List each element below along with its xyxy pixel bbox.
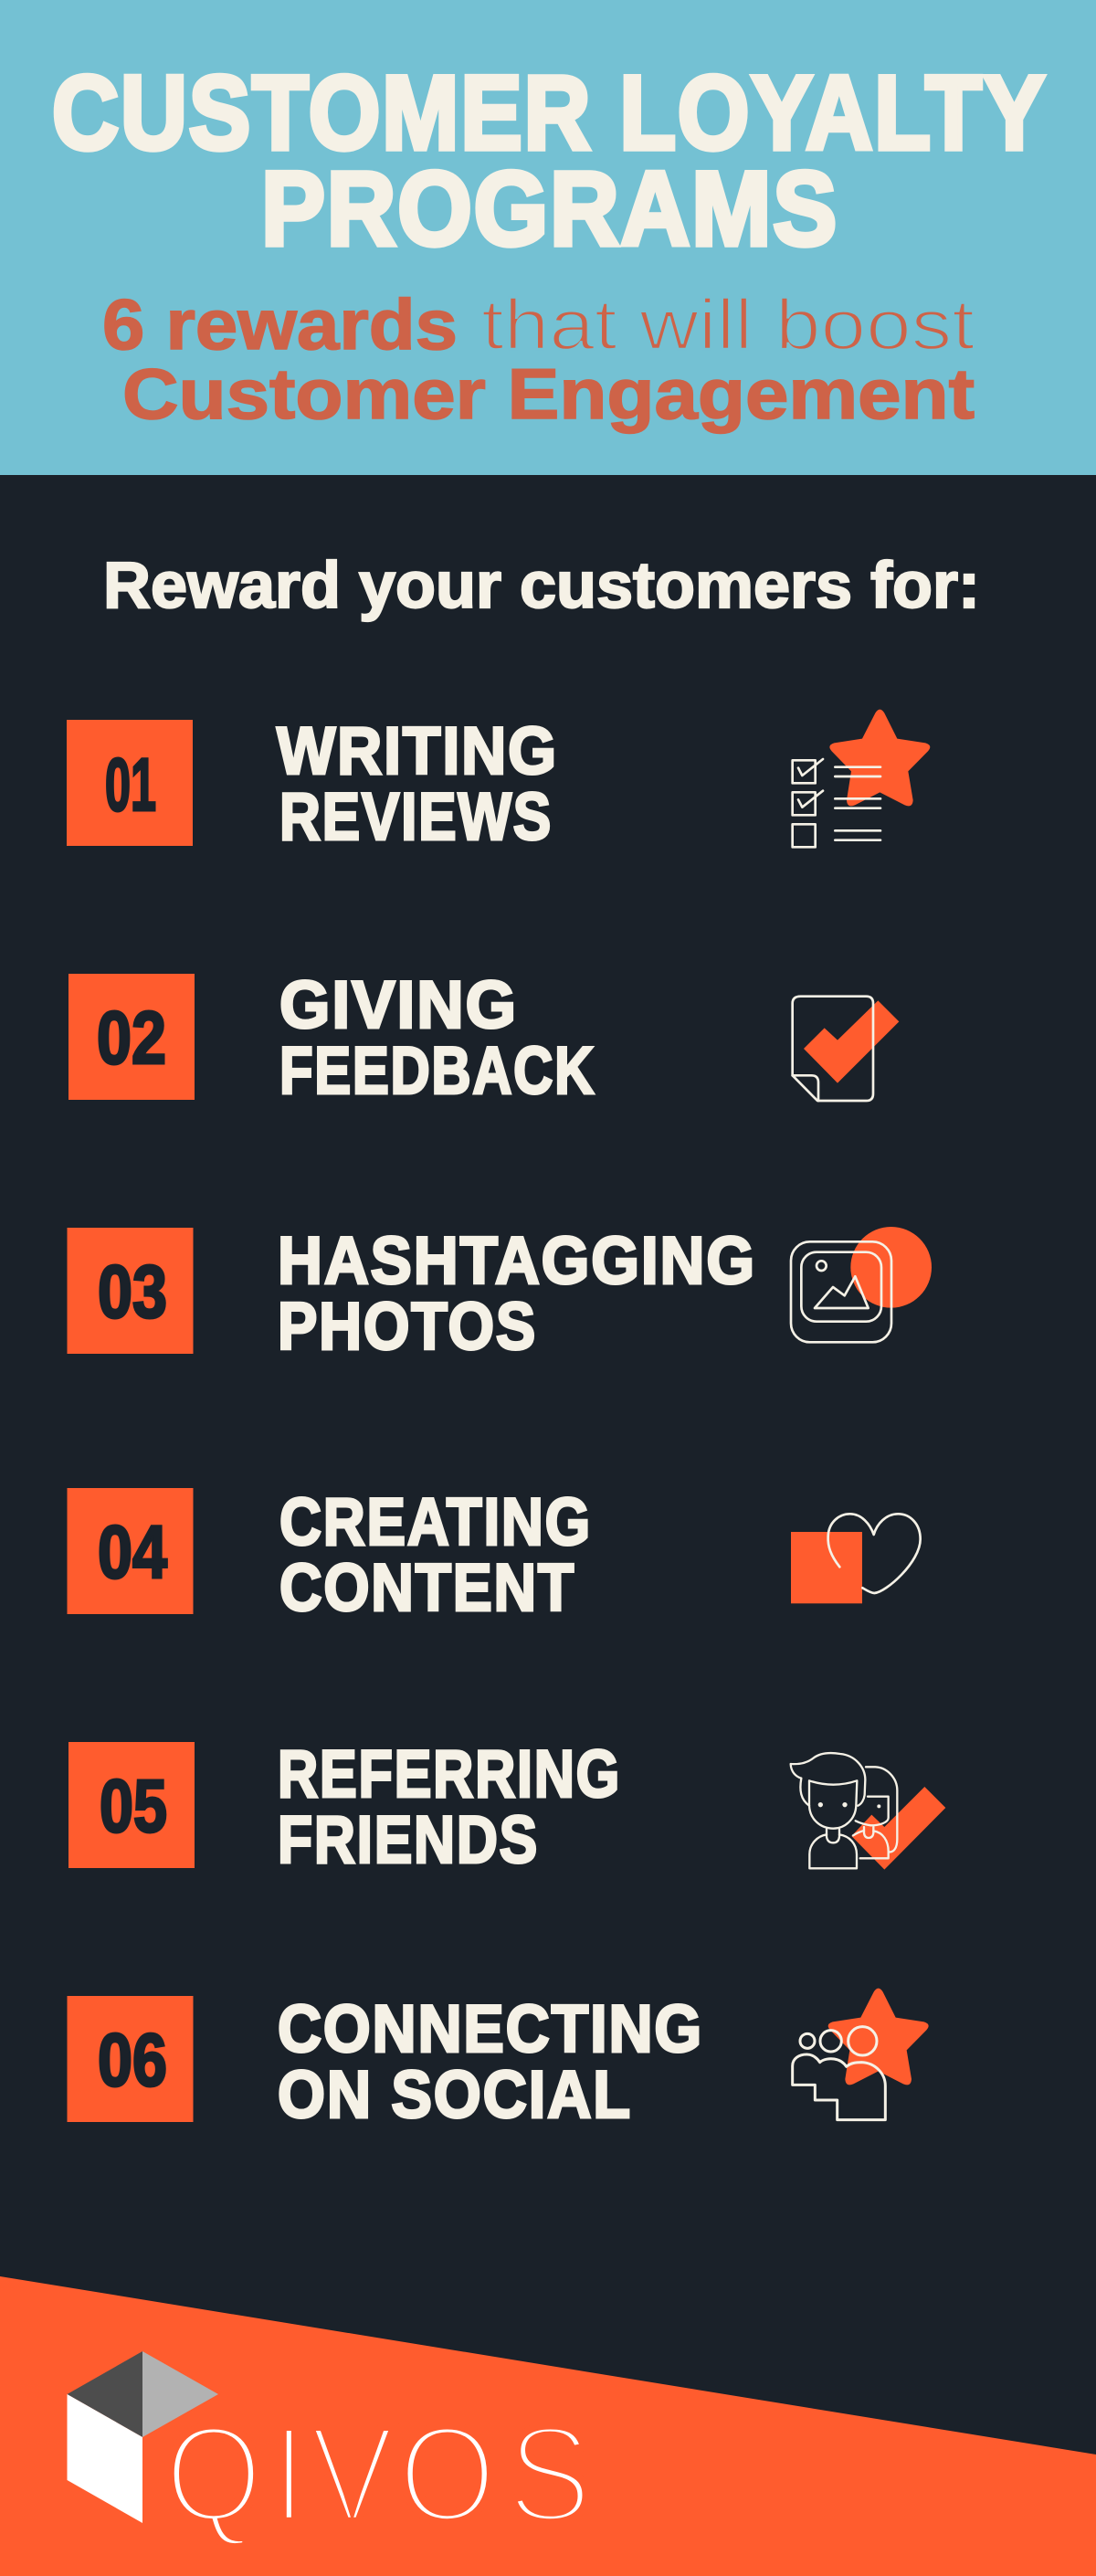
label: giving feedback [279,968,595,1108]
label: writing reviews: WRITING [277,714,558,788]
label: giving feedback: FEEDBACK [279,1034,595,1108]
label: hashtagging photos: HASHTAGGING [278,1224,756,1298]
subtitle [102,284,975,434]
number badge 01 [67,720,193,846]
item 02: giving feedback [68,968,899,1108]
label: referring friends: REFERRING [278,1737,621,1811]
label: writing reviews: REVIEWS [279,780,553,854]
number badge 04: 04 [98,1511,167,1594]
icon: photo frame with circle [791,1227,932,1342]
icon: two people with check [791,1753,945,1870]
number badge 05 [68,1742,195,1868]
label: giving feedback: GIVING [279,968,518,1042]
label: referring friends [278,1737,621,1877]
number badge 01: 01 [105,744,156,827]
title [52,55,1047,268]
icon: checklist with star [793,710,930,847]
logo: wordmark: QIVOS [164,2398,592,2550]
item 03: hashtagging photos [68,1224,932,1364]
number badge 04 [68,1488,194,1614]
label: creating content: CONTENT [279,1551,575,1625]
label: hashtagging photos: PHOTOS [278,1290,537,1364]
label: referring friends: FRIENDS [278,1803,539,1877]
item 04: creating content [68,1485,921,1625]
number badge 06 [68,1996,194,2122]
label: creating content: CREATING [279,1485,592,1559]
item 05: referring friends [68,1737,945,1877]
subtitle: 6 rewards [102,284,458,364]
label: creating content [279,1485,592,1625]
logo: cube mark [68,2351,218,2523]
label: connecting on social: ON SOCIAL [278,2058,632,2132]
label: hashtagging photos [278,1224,756,1364]
icon: square and heart [791,1514,921,1603]
label: writing reviews [277,714,558,854]
title: PROGRAMS [261,151,838,268]
item 01: writing reviews [67,710,930,854]
heading: reward your customers: Reward your customers for: [103,550,980,622]
number badge 05: 05 [100,1765,167,1848]
label: connecting on social: CONNECTING [278,1992,703,2066]
subtitle: Customer Engagement [122,354,975,434]
icon: document with check [793,997,899,1101]
panel: footer [0,2276,1096,2576]
label: connecting on social [278,1992,703,2132]
number badge 06: 06 [98,2019,167,2102]
subtitle: that will boost [481,284,975,364]
icon: group of people with star [793,1989,929,2120]
number badge 03: 03 [98,1251,167,1334]
number badge 03 [68,1228,194,1354]
panel: header [0,0,1096,475]
item 06: connecting on social [68,1989,929,2132]
number badge 02 [68,974,195,1100]
number badge 02: 02 [97,997,166,1080]
